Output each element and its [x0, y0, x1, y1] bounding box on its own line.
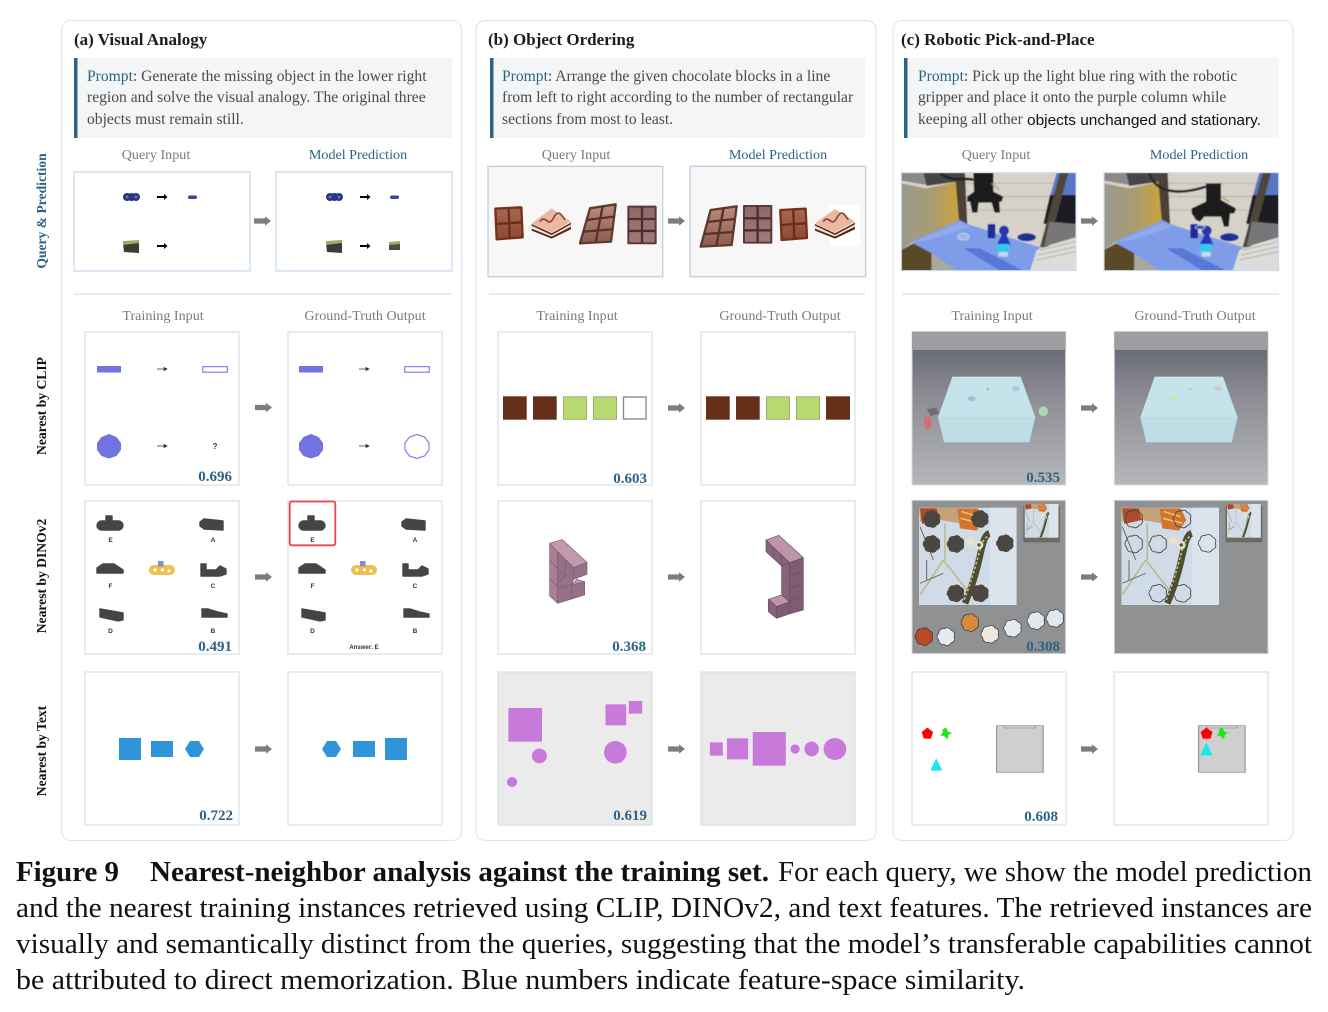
similarity score: 0.603 [613, 471, 647, 487]
prompt block: object ordering: Prompt: Arrange the given chocolate blocks in a line [502, 68, 830, 85]
model prediction image: chocolates [690, 166, 866, 277]
prompt block: object ordering: from left to right according to the number of rectangular [502, 89, 854, 106]
figure caption: Figure 9 [16, 856, 119, 888]
DINOv2 ground truth: C [413, 583, 418, 590]
arrow [255, 403, 272, 412]
prompt block: pick and place: gripper and place it onto the purple column while [918, 89, 1226, 106]
CLIP ground truth: squares [701, 332, 855, 485]
arrow [1081, 403, 1098, 413]
arrow [1081, 744, 1098, 754]
similarity score: 0.368 [612, 639, 646, 655]
CLIP training input: ? [213, 442, 218, 451]
model prediction image [276, 172, 452, 271]
DINOv2 ground truth: F [311, 583, 315, 590]
heading: object ordering: (b) Object Ordering [488, 30, 635, 49]
row label: text: Nearest by Text [34, 705, 49, 796]
figure caption: Nearest-neighbor analysis against the training set. [150, 856, 769, 888]
column labels: training row: Training Input [536, 308, 618, 324]
row label: DINOv2: Nearest by DINOv2 [34, 519, 49, 633]
panel: robotic pick-and-place [893, 20, 1293, 840]
CLIP training input: squares [498, 332, 652, 487]
figure caption: and the nearest training instances retrieved using CLIP, DINOv2, and text features. The retrieved instances are [16, 892, 1312, 924]
figure caption: visually and semantically distinct from the queries, suggesting that the model’s transferable capabilities cannot [16, 928, 1312, 960]
column labels: query row: Model Prediction [1150, 147, 1248, 163]
DINOv2 training input: cubes [498, 501, 652, 655]
DINOv2 ground truth [288, 501, 442, 654]
similarity score: 0.535 [1026, 470, 1060, 486]
arrow [668, 744, 685, 754]
column labels: training row: Ground-Truth Output [1134, 308, 1256, 324]
text-nearest ground truth [288, 672, 442, 825]
CLIP training input: 3D scene [912, 332, 1066, 486]
column labels: query row [122, 147, 407, 163]
DINOv2 training input: A [211, 537, 216, 544]
text-nearest training input: tray [912, 672, 1066, 825]
text-nearest training input [85, 672, 239, 825]
prompt block: visual analogy: objects must remain still. [87, 111, 244, 128]
prompt block: pick and place: objects unchanged and stationary. [1027, 112, 1261, 129]
column labels: training row [951, 308, 1256, 324]
DINOv2 ground truth: B [413, 628, 418, 635]
arrow [1081, 572, 1098, 582]
prompt block: visual analogy [74, 58, 452, 138]
column labels: training row: Ground-Truth Output [304, 308, 426, 324]
CLIP training input [85, 332, 239, 485]
column labels: query row [962, 147, 1248, 163]
arrow [255, 572, 272, 582]
similarity score: 0.619 [613, 808, 647, 824]
query input image: robot [901, 173, 1076, 271]
text-nearest ground truth: purple shapes [701, 672, 855, 825]
DINOv2 training input [85, 501, 239, 655]
CLIP ground truth [288, 332, 442, 485]
DINOv2 ground truth: cubes [701, 501, 855, 654]
similarity score: 0.722 [199, 808, 233, 824]
model prediction image: robot [1104, 173, 1279, 271]
column labels: training row [122, 308, 426, 324]
DINOv2 training input: E [108, 537, 113, 544]
column labels: training row: Ground-Truth Output [719, 308, 841, 324]
answer highlight [290, 502, 335, 545]
DINOv2 ground truth: jigsaw [1114, 500, 1268, 654]
heading: robotic pick-and-place: (c) Robotic Pick-and-Place [901, 30, 1095, 49]
figure caption: be attributed to direct memorization. Blue numbers indicate feature-space similarity. [16, 964, 1025, 996]
query input image [74, 172, 250, 271]
arrow [1081, 216, 1098, 226]
panel: object ordering [476, 20, 876, 840]
figure caption: For each query, we show the model prediction [778, 856, 1312, 888]
heading: visual analogy: (a) Visual Analogy [74, 30, 208, 49]
column labels: query row: Query Input [962, 147, 1030, 163]
prompt block: object ordering: sections from most to least. [502, 111, 673, 128]
DINOv2 ground truth: D [310, 628, 315, 635]
arrow [668, 572, 685, 582]
column labels: query row: Query Input [542, 147, 610, 163]
column labels: query row: Model Prediction [729, 147, 827, 163]
arrow [254, 216, 271, 226]
prompt block: pick and place: keeping all other [918, 111, 1024, 128]
column labels: training row: Training Input [122, 308, 204, 324]
similarity score: 0.491 [198, 639, 232, 655]
arrow [668, 403, 685, 413]
column labels: query row: Query Input [122, 147, 190, 163]
prompt block: visual analogy: Prompt: Generate the missing object in the lower right [87, 68, 427, 85]
column labels: query row: Model Prediction [309, 147, 407, 163]
DINOv2 training input: F [109, 583, 113, 590]
text-nearest training input: purple shapes [498, 672, 652, 825]
text-nearest ground truth: tray [1114, 672, 1268, 825]
row label: query and prediction: Query & Prediction [34, 153, 49, 269]
DINOv2 training input: C [211, 583, 216, 590]
DINOv2 training input: jigsaw [912, 500, 1066, 655]
panel: visual analogy [62, 20, 462, 840]
DINOv2 ground truth: E [310, 537, 315, 544]
DINOv2 ground truth: Answer: E [349, 645, 379, 651]
prompt block: pick and place [904, 58, 1278, 138]
arrow [255, 744, 272, 754]
figure caption [16, 856, 1312, 996]
prompt block: object ordering [490, 58, 865, 138]
prompt block: visual analogy: region and solve the visual analogy. The original three [87, 89, 426, 106]
similarity score: 0.696 [198, 469, 232, 485]
DINOv2 training input: B [211, 628, 216, 635]
column labels: query row [542, 147, 827, 163]
DINOv2 training input: D [108, 628, 113, 635]
arrow [668, 216, 685, 226]
DINOv2 ground truth: A [413, 537, 418, 544]
column labels: training row [536, 308, 841, 324]
query input image: chocolates [488, 166, 663, 277]
column labels: training row: Training Input [951, 308, 1033, 324]
similarity score: 0.308 [1026, 639, 1060, 655]
row label: CLIP: Nearest by CLIP [34, 357, 49, 455]
similarity score: 0.608 [1024, 809, 1058, 825]
prompt block: pick and place: Prompt: Pick up the light blue ring with the robotic [918, 68, 1237, 85]
CLIP ground truth: 3D scene [1114, 332, 1268, 485]
